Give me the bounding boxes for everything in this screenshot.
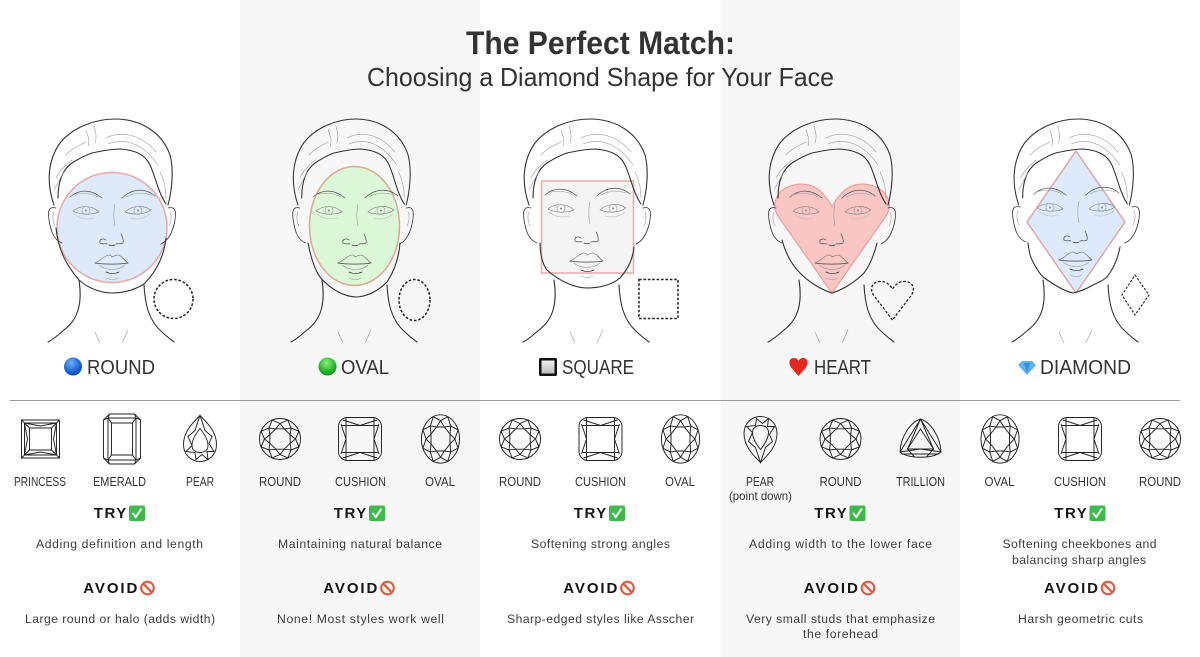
icon: princess: [22, 420, 60, 458]
face: heart: [768, 119, 913, 343]
try text: Adding definition and length: [36, 537, 203, 551]
icon: dashed circle: [154, 280, 193, 318]
icon: round: [820, 418, 861, 460]
label: pear: PEAR: [186, 475, 214, 489]
avoid text: the forehead: [803, 627, 878, 641]
avoid heading: AVOID: [563, 580, 617, 597]
icon: check: [369, 506, 385, 521]
try text: Maintaining natural balance: [278, 537, 442, 551]
avoid heading: AVOID: [1044, 580, 1098, 597]
avoid text: Harsh geometric cuts: [1018, 612, 1143, 626]
label: cushion: CUSHION: [1054, 475, 1106, 489]
label: cushion: CUSHION: [335, 475, 386, 489]
icon: prohibited: [381, 582, 394, 594]
face: oval: [291, 119, 430, 343]
icon: round: [500, 418, 540, 460]
face: round: [48, 119, 193, 343]
icon: dashed diamond: [1122, 275, 1149, 315]
face: square: [523, 119, 678, 343]
icon: check: [129, 506, 145, 521]
label: oval: OVAL: [425, 475, 455, 489]
label: round: ROUND: [820, 475, 862, 489]
avoid text: [746, 612, 935, 641]
try heading: TRY: [94, 505, 126, 522]
title: [367, 25, 834, 92]
face: diamond: [1012, 119, 1149, 343]
label: oval: OVAL: [984, 475, 1015, 489]
icon: emerald: [104, 414, 140, 464]
icon: check: [850, 506, 866, 521]
try text: Softening strong angles: [531, 537, 670, 551]
avoid text: None! Most styles work well: [277, 612, 444, 626]
label: princess: PRINCESS: [14, 475, 66, 489]
avoid heading: AVOID: [83, 580, 137, 597]
label: round: ROUND: [499, 475, 541, 489]
avoid heading: AVOID: [323, 580, 377, 597]
panel: square recommendations: [499, 415, 700, 626]
avoid heading: AVOID: [804, 580, 858, 597]
label: point down: (point down): [729, 489, 792, 503]
try heading: TRY: [574, 505, 606, 522]
try text: Softening cheekbones and: [1002, 537, 1156, 551]
try heading: TRY: [814, 505, 847, 522]
icon: prohibited: [1102, 582, 1114, 594]
icon: dashed oval: [399, 280, 430, 320]
label: heart: HEART: [814, 357, 871, 379]
title: The Perfect Match:: [466, 25, 735, 61]
icon: prohibited: [141, 582, 154, 594]
avoid text: Very small studs that emphasize: [746, 612, 935, 626]
icon: cushion: [338, 418, 382, 460]
icon: cushion: [579, 418, 622, 460]
label: round: ROUND: [259, 475, 301, 489]
label: emerald: EMERALD: [93, 475, 146, 489]
icon: pear: [184, 416, 216, 462]
try heading: TRY: [1054, 505, 1087, 522]
label: square: [539, 357, 634, 379]
panel: column shading heart: [721, 0, 960, 657]
try text: balancing sharp angles: [1012, 553, 1146, 567]
icon: trillion: [900, 419, 941, 457]
icon: oval: [421, 415, 460, 463]
icon: prohibited: [862, 582, 874, 594]
label: oval: [318, 357, 389, 379]
title: Choosing a Diamond Shape for Your Face: [367, 62, 834, 92]
label: heart: [789, 357, 871, 379]
avoid text: Large round or halo (adds width): [25, 612, 215, 626]
icon: prohibited: [621, 582, 634, 594]
icon: check: [1090, 506, 1106, 521]
icon: pear point down: [744, 416, 777, 462]
label: diamond: DIAMOND: [1040, 357, 1131, 379]
try heading: TRY: [334, 505, 366, 522]
label: oval: OVAL: [341, 357, 389, 379]
divider: [10, 400, 1180, 401]
avoid text: Sharp-edged styles like Asscher: [507, 612, 694, 626]
icon: check: [609, 506, 625, 521]
label: trillion: TRILLION: [896, 475, 945, 489]
try text: [1002, 537, 1156, 567]
panel: diamond recommendations: [981, 415, 1181, 626]
label: oval: OVAL: [665, 475, 695, 489]
icon: cushion: [1058, 418, 1102, 460]
label: round: ROUND: [87, 357, 155, 379]
label: cushion: CUSHION: [575, 475, 626, 489]
label: square: SQUARE: [562, 357, 634, 379]
panel: column shading oval: [240, 0, 480, 657]
panel: heart recommendations: [729, 416, 945, 641]
label: round: ROUND: [1139, 475, 1181, 489]
icon: dashed heart: [872, 281, 913, 320]
label: pear: PEAR: [746, 475, 774, 489]
icon: dashed square: [639, 280, 678, 318]
panel: oval recommendations: [259, 415, 460, 626]
try text: Adding width to the lower face: [749, 537, 932, 551]
icon: round: [1140, 418, 1180, 460]
icon: oval: [661, 415, 700, 463]
icon: round: [260, 418, 300, 460]
panel: round recommendations: [14, 414, 216, 626]
icon: oval: [981, 415, 1019, 463]
